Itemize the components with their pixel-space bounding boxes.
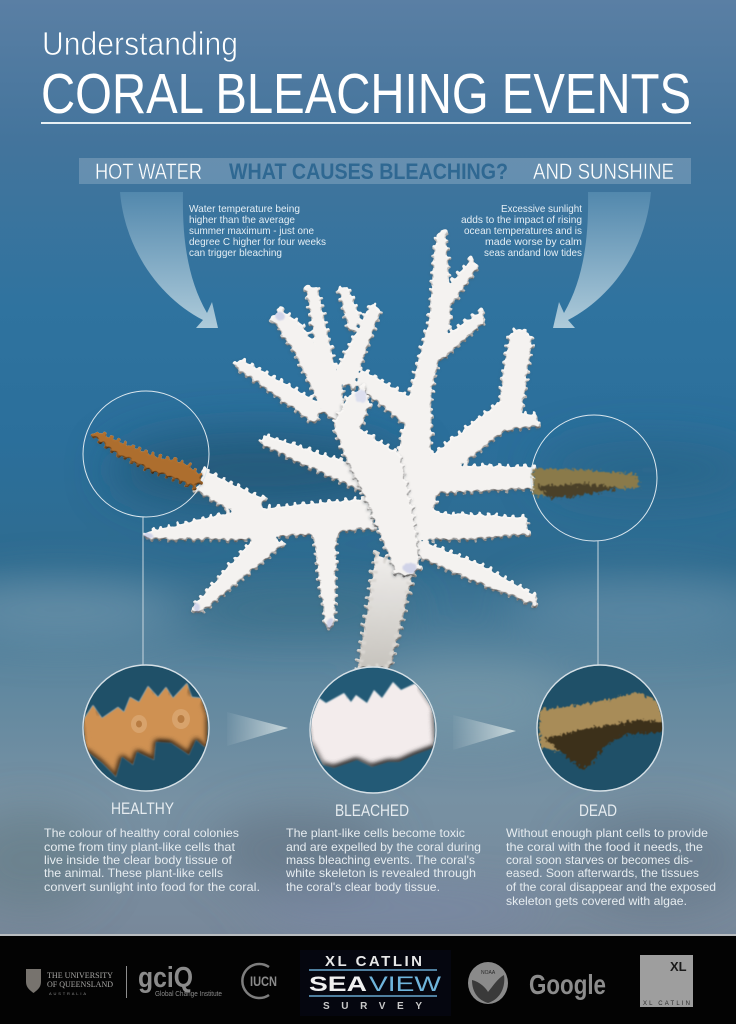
- logo: IUCN: [242, 964, 277, 998]
- coral front branch: [335, 389, 418, 575]
- banner: what causes bleaching: [79, 158, 691, 184]
- text: hot water: can trigger bleaching: [189, 247, 282, 259]
- label: bleached: BLEACHED: [335, 801, 409, 820]
- text: dead: of the coral disappear and the exposed: [506, 880, 716, 894]
- text: bleached: the coral's clear body tissue.: [286, 880, 440, 894]
- text: hot water: [189, 203, 326, 259]
- text: sunshine: Excessive sunlight: [501, 203, 582, 215]
- text: dead: [506, 826, 716, 908]
- text: dead: the coral with the food it needs, the: [506, 840, 703, 854]
- text: dead: Without enough plant cells to provide: [506, 826, 708, 840]
- text: sunshine: adds to the impact of rising: [461, 214, 582, 226]
- circle: dead coral: [537, 665, 663, 791]
- logo: University of Queensland: THE UNIVERSITY: [47, 971, 113, 980]
- logo: IUCN: IUCN: [250, 973, 277, 989]
- circle: bleached coral: [309, 667, 436, 793]
- logo: Global Change Institute: Global Change Institute: [155, 991, 222, 998]
- callout: dead branch lens: [531, 415, 657, 666]
- text: healthy: live inside the clear body tissue of: [44, 853, 233, 867]
- text: hot water: Water temperature being: [189, 203, 300, 215]
- logo: NOAA: [468, 962, 508, 1004]
- arrow: bleached to dead: [453, 715, 516, 750]
- logo: XL Catlin square: [640, 955, 693, 1007]
- arrow: hot water: [120, 192, 218, 328]
- label: dead: DEAD: [579, 801, 617, 820]
- text: healthy: the animal. These plant-like cells: [44, 866, 223, 880]
- logo: Global Change Institute: [138, 962, 222, 998]
- coral: bleached white skeleton: [144, 234, 536, 668]
- title: Understanding: [42, 25, 238, 62]
- logo: XL Catlin Seaview Survey: SURVEY: [323, 1001, 422, 1012]
- text: healthy: come from tiny plant-like cells that: [44, 840, 236, 854]
- logo: XL Catlin Seaview Survey: XL CATLIN: [325, 953, 422, 970]
- text: sunshine: ocean temperatures and is: [464, 225, 582, 237]
- coral branches: [144, 234, 536, 628]
- text: dead: skeleton gets covered with algae.: [506, 894, 687, 908]
- logo: University of Queensland: AUSTRALIA: [49, 991, 86, 996]
- logo: NOAA: NOAA: [481, 970, 496, 976]
- text: hot water: higher than the average: [189, 214, 295, 226]
- coral trunk: [358, 555, 414, 668]
- text: hot water: summer maximum - just one: [189, 225, 314, 237]
- label: healthy: HEALTHY: [111, 799, 174, 818]
- logo: Google: Google: [529, 969, 606, 1000]
- text: hot water: degree C higher for four weeks: [189, 236, 326, 248]
- text: healthy: The colour of healthy coral colonies: [44, 826, 239, 840]
- banner: what causes bleaching: HOT WATER: [95, 159, 202, 184]
- text: bleached: and are expelled by the coral during: [286, 840, 481, 854]
- banner: what causes bleaching: AND SUNSHINE: [533, 159, 674, 184]
- logo: XL Catlin Seaview Survey: [300, 950, 451, 1016]
- logo: XL Catlin Seaview Survey: VIEW: [369, 973, 441, 996]
- text: healthy: convert sunlight into food for the coral.: [44, 880, 260, 894]
- text: dead: eased. Soon afterwards, the tissues: [506, 866, 699, 880]
- logo: University of Queensland: [26, 966, 127, 998]
- circle: healthy coral: [83, 665, 209, 791]
- logo: University of Queensland: OF QUEENSLAND: [47, 980, 113, 989]
- logo: XL Catlin Seaview Survey: SEA: [309, 973, 367, 996]
- text: sunshine: [461, 203, 582, 259]
- footer: partner logos: [0, 934, 736, 1024]
- logo: XL Catlin square: XL: [670, 959, 687, 974]
- text: bleached: [285, 826, 481, 894]
- text: bleached: mass bleaching events. The coral's: [286, 853, 475, 867]
- text: bleached: white skeleton is revealed through: [285, 866, 476, 880]
- logo: XL Catlin square: XL CATLIN: [643, 1001, 690, 1007]
- banner: what causes bleaching: WHAT CAUSES BLEACHING?: [229, 159, 508, 184]
- text: healthy: [44, 826, 260, 894]
- text: sunshine: seas andand low tides: [484, 247, 582, 259]
- title: [41, 25, 691, 126]
- logo: Global Change Institute: gciQ: [138, 962, 193, 994]
- arrow: sunshine: [553, 192, 651, 328]
- text: dead: coral soon starves or becomes dis-: [506, 853, 693, 867]
- arrow: healthy to bleached: [227, 712, 288, 746]
- callout: healthy branch lens: [83, 391, 209, 666]
- text: sunshine: made worse by calm: [485, 236, 582, 248]
- text: bleached: The plant-like cells become toxic: [286, 826, 465, 840]
